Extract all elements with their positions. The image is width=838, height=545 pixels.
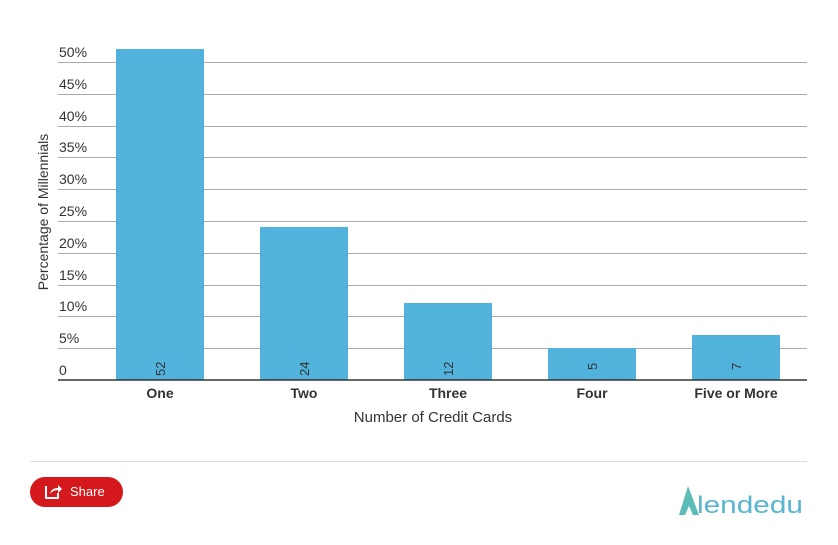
share button: Share (70, 484, 105, 499)
y axis labels: 0 (59, 362, 67, 378)
y axis labels: 20% (59, 235, 87, 251)
y axis labels: 10% (59, 298, 87, 314)
y axis labels: 25% (59, 203, 87, 219)
y axis labels: 5% (59, 330, 79, 346)
y axis title: Percentage of Millennials (35, 134, 51, 290)
bar value labels (153, 362, 744, 376)
x axis title: Number of Credit Cards (354, 409, 512, 426)
logo: lendedu (679, 486, 803, 519)
y axis labels: 30% (59, 171, 87, 187)
bar value labels: 24 (297, 362, 312, 376)
y axis labels (59, 44, 87, 378)
x labels: Four (576, 385, 608, 401)
bar value labels: 12 (441, 362, 456, 376)
bar value labels: 52 (153, 362, 168, 376)
bars (116, 49, 780, 380)
y axis labels: 15% (59, 267, 87, 283)
y axis labels: 45% (59, 76, 87, 92)
x labels: Five or More (694, 385, 778, 401)
y axis labels: 40% (59, 108, 87, 124)
logo: lendedu: lendedu (697, 492, 803, 519)
x labels (146, 385, 778, 401)
y axis labels: 35% (59, 139, 87, 155)
y axis labels: 50% (59, 44, 87, 60)
x labels: Three (429, 385, 467, 401)
x labels: One (146, 385, 174, 401)
bar value labels: 7 (729, 363, 744, 370)
bar value labels: 5 (585, 363, 600, 370)
x labels: Two (291, 385, 317, 401)
share button (30, 477, 123, 507)
